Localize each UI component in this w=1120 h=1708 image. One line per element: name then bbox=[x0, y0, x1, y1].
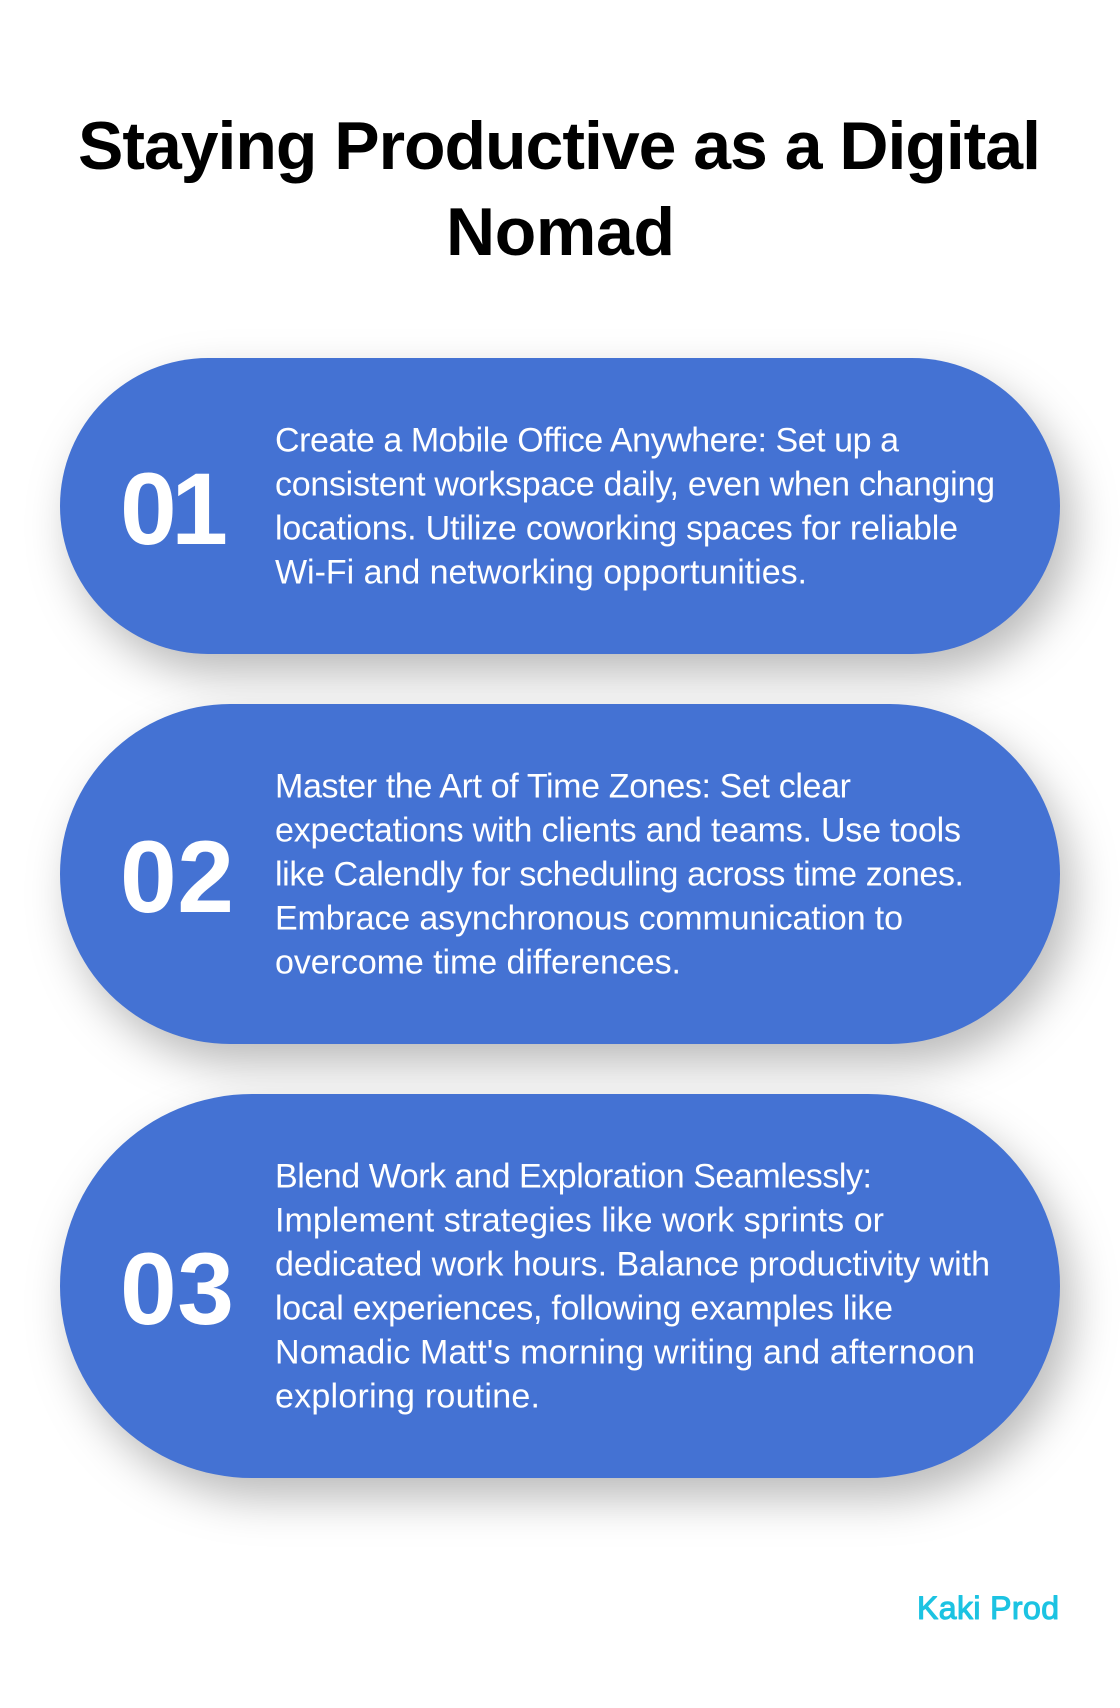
panel: step 01 bbox=[60, 358, 1060, 654]
step 03 text: local experiences, following examples like bbox=[275, 1290, 893, 1328]
step number 01: 01 bbox=[120, 452, 228, 566]
step 01 text: consistent workspace daily, even when changing bbox=[275, 466, 995, 504]
step 03 text bbox=[275, 1158, 990, 1416]
step 02 text: expectations with clients and teams. Use tools bbox=[275, 812, 961, 850]
step 03 text: exploring routine. bbox=[275, 1378, 540, 1416]
step 02 text: like Calendly for scheduling across time zones. bbox=[275, 856, 964, 894]
title bbox=[78, 108, 1041, 270]
brand logo text: Kaki Prod bbox=[917, 1590, 1059, 1626]
step number 03: 03 bbox=[120, 1232, 234, 1346]
step 03 text: dedicated work hours. Balance productivity with bbox=[275, 1246, 990, 1284]
step 01 text bbox=[275, 422, 995, 592]
step 03 text: Implement strategies like work sprints or bbox=[275, 1202, 884, 1240]
title: Staying Productive as a Digital bbox=[78, 108, 1041, 184]
step 03 text: Blend Work and Exploration Seamlessly: bbox=[275, 1158, 872, 1196]
panel: step 03 bbox=[60, 1094, 1060, 1478]
step 01 text: locations. Utilize coworking spaces for reliable bbox=[275, 510, 958, 548]
step 02 text bbox=[275, 768, 964, 982]
title: Nomad bbox=[446, 194, 675, 270]
step 02 text: Master the Art of Time Zones: Set clear bbox=[275, 768, 851, 806]
step 01 text: Wi-Fi and networking opportunities. bbox=[275, 554, 807, 592]
panel: step 02 bbox=[60, 704, 1060, 1044]
step 03 text: Nomadic Matt's morning writing and afternoon bbox=[275, 1334, 975, 1372]
step 01 text: Create a Mobile Office Anywhere: Set up a bbox=[275, 422, 899, 460]
step number 02: 02 bbox=[120, 820, 234, 934]
step 02 text: overcome time differences. bbox=[275, 944, 681, 982]
step 02 text: Embrace asynchronous communication to bbox=[275, 900, 903, 938]
